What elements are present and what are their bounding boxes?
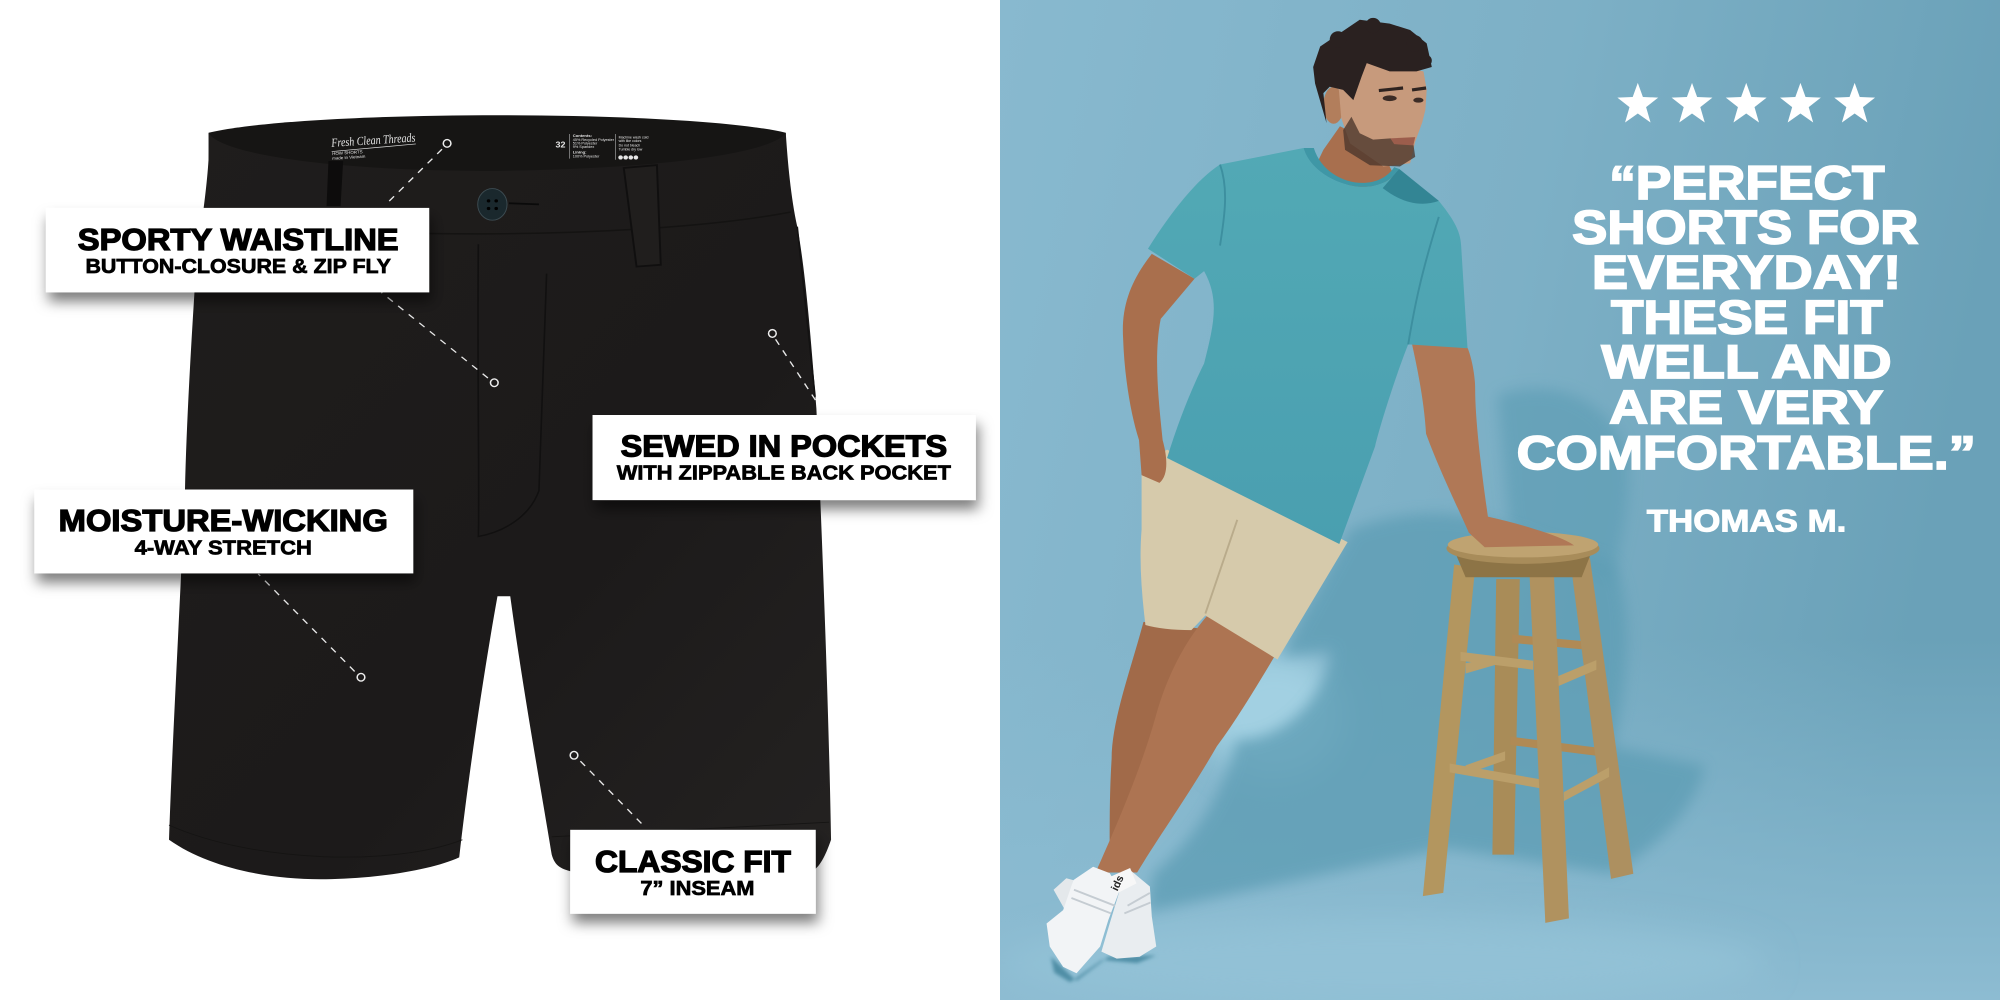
illustration: leaning arm and hand — [1411, 341, 1574, 547]
illustration: front leg — [1096, 615, 1274, 873]
text: reviewer name: THOMAS M. — [1647, 502, 1846, 538]
callout pointer: classic fit — [570, 751, 644, 826]
callout: moisture-wicking: 4-WAY STRETCH — [135, 537, 312, 559]
callout: moisture-wicking: MOISTURE-WICKING — [59, 503, 388, 538]
callout: classic fit — [570, 830, 816, 914]
panel: product shorts features — [34, 115, 976, 914]
waistband label text — [330, 131, 649, 161]
waistband label text: 51% Polyester — [573, 142, 598, 145]
callout: sewed in pockets: SEWED IN POCKETS — [621, 429, 947, 463]
waistband label text: made in Vietnam — [332, 154, 366, 161]
waistband label text: Tumble dry low — [619, 148, 643, 151]
callout pointer: moisture-wicking — [258, 574, 365, 681]
panel: customer review photo — [1000, 0, 2000, 1000]
illustration: neck — [1319, 126, 1394, 187]
callout: sewed in pockets — [593, 415, 976, 500]
background: studio backdrop — [1000, 0, 2000, 1000]
waistband label text: HOW SHORTS — [332, 149, 363, 156]
callout: sporty waistline — [46, 208, 429, 292]
waistband label text: 100% Polyester — [573, 155, 600, 158]
text: customer quote: THESE FIT — [1611, 292, 1883, 345]
illustration: rear arm and hand — [1123, 254, 1195, 483]
callout: moisture-wicking — [34, 490, 413, 573]
icon: five review stars — [1617, 83, 1875, 122]
waistband label text: Fresh Clean Threads — [330, 131, 416, 150]
illustration: beige shorts — [1141, 450, 1348, 659]
text: customer quote: “PERFECT — [1609, 157, 1885, 210]
waistband label text: with like colors — [619, 139, 642, 143]
waistband label text: 45% Recycled Polyester — [573, 138, 615, 142]
illustration: head and hair — [1313, 18, 1432, 166]
text: customer quote: WELL AND — [1601, 336, 1892, 389]
waistband label text: Lining: — [573, 150, 587, 154]
illustration: white sneakers — [1047, 867, 1156, 982]
shoe shadow — [1051, 955, 1156, 982]
callout: sporty waistline: BUTTON-CLOSURE & ZIP FLY — [85, 256, 391, 278]
text: customer quote: EVERYDAY! — [1592, 246, 1901, 299]
illustration: wooden stool — [1423, 532, 1633, 923]
illustration: rear leg — [1110, 622, 1198, 842]
shadow: person and stool cast on backdrop — [1147, 388, 1705, 912]
waistband label text: Contents: — [573, 133, 592, 138]
text: customer quote — [1517, 157, 1976, 480]
text: customer quote: ARE VERY — [1609, 381, 1883, 434]
illustration: black shorts — [169, 115, 831, 879]
callout pointer: waistline lower — [381, 292, 498, 387]
waistband label text: 9% Spandex — [573, 145, 595, 149]
callout: sewed in pockets: WITH ZIPPABLE BACK POCKET — [617, 462, 951, 484]
waistband label text: Machine wash cold — [619, 136, 649, 140]
callout: classic fit: 7” INSEAM — [640, 878, 755, 900]
text: customer quote: COMFORTABLE.” — [1517, 427, 1976, 480]
callout pointer: waistline upper — [386, 140, 451, 204]
waistband label text: 32 — [556, 140, 566, 149]
callout pointer: pockets — [769, 330, 816, 402]
belt loops — [327, 161, 661, 267]
illustration: white sneakers: ids — [1109, 874, 1127, 893]
callout: sporty waistline: SPORTY WAISTLINE — [78, 222, 399, 257]
text: customer quote: SHORTS FOR — [1572, 202, 1918, 255]
callout: classic fit: CLASSIC FIT — [595, 844, 791, 879]
illustration: teal t-shirt — [1148, 148, 1468, 544]
waistband label text: Do not bleach — [619, 143, 640, 147]
icon: button — [478, 189, 539, 220]
